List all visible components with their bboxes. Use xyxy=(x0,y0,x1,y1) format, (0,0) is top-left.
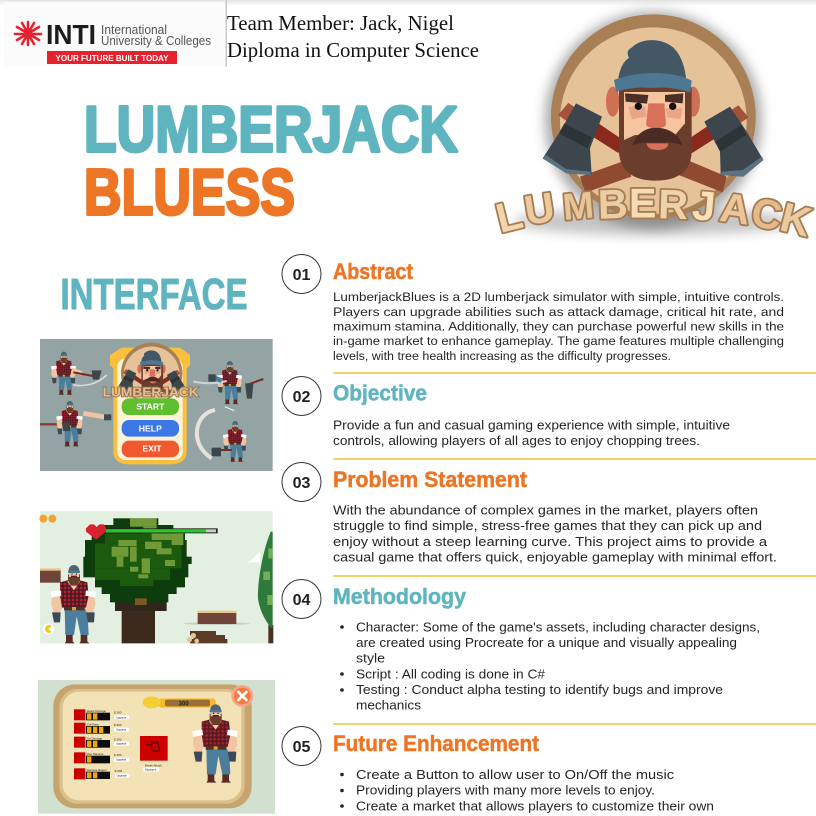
logo wordmark: A xyxy=(717,184,753,234)
section 04: methodology: are created using Procreate for a unique and visually appealing xyxy=(356,635,737,650)
upgrade row: attack damage xyxy=(74,709,129,720)
character pose: bottom left xyxy=(40,401,111,446)
section 03: problem statement: enjoy without a steep learning curve. This project aims to provide a xyxy=(333,534,768,549)
health bar xyxy=(105,528,218,533)
header: INTI logo: University & Colleges xyxy=(101,33,211,48)
header: INTI logo xyxy=(4,2,224,66)
character xyxy=(51,565,96,643)
screenshot: main menu: LUMBERJACK xyxy=(103,385,200,399)
screenshot: gameplay xyxy=(39,511,273,643)
upgrade row: attack damage: $ 200 xyxy=(114,711,122,715)
section 03: problem statement: casual game that offers quick, enjoyable gameplay with minimal effort. xyxy=(333,550,777,564)
upgrade row: stamina regen xyxy=(74,768,130,779)
section 02: objective xyxy=(282,376,730,448)
upgrade row: crit rate: Upgrade xyxy=(116,728,127,732)
icon: red asterisk xyxy=(15,22,41,45)
section 05: future enhancement: 05 xyxy=(293,739,310,756)
upgrade row: stamina regen: Stamina Regen xyxy=(87,768,107,772)
wooden board xyxy=(53,684,252,808)
logo wordmark: M xyxy=(561,183,596,228)
screenshot: upgrade market xyxy=(38,680,275,814)
joystick icon xyxy=(43,623,54,635)
logo wordmark: R xyxy=(657,181,689,228)
title: LUMBERJACK xyxy=(84,92,458,166)
upgrade row: crit rate: $ 300 xyxy=(114,723,122,727)
section 02: objective: 02 xyxy=(293,389,310,406)
section 04: methodology: 04 xyxy=(293,592,310,609)
button: help xyxy=(122,420,179,437)
header: INTI logo: International xyxy=(101,22,167,37)
clouds xyxy=(83,538,260,562)
close button xyxy=(231,685,253,707)
pixel tree xyxy=(83,518,192,643)
icon: heart xyxy=(86,524,106,540)
upgrade row: stamina regen: Upgrade xyxy=(117,774,127,778)
upgrade row: crit rate: Crit Rate xyxy=(87,722,99,726)
section 01: abstract: maximum stamina. Additionally, they can purchase powerful new skills in the xyxy=(333,320,784,334)
team and course text: Diploma in Computer Science xyxy=(227,38,479,62)
button: exit xyxy=(122,441,179,457)
logo wordmark: J xyxy=(690,182,717,230)
screenshot: main menu xyxy=(40,339,273,471)
upgrade row: crit damage: Upgrade xyxy=(116,742,127,746)
section 01: abstract: Abstract xyxy=(333,259,414,284)
section 03: problem statement xyxy=(282,462,777,564)
upgrade row: crit damage: Crit Damage xyxy=(87,736,102,740)
upgrade row: crit damage xyxy=(74,736,129,748)
heading: interface: INTERFACE xyxy=(60,270,248,319)
upgrade row: crit damage: $ 200 xyxy=(114,738,122,742)
section 01: abstract: 01 xyxy=(293,267,310,284)
section 01: abstract: Players can upgrade abilities such as attack damage, critical hit rate, and xyxy=(333,305,784,319)
section 03: problem statement: 03 xyxy=(293,475,310,492)
team and course text: Team Member: Jack, Nigel xyxy=(227,11,454,35)
section 03: problem statement: struggle to find simple, stress-free games that they can pick up and xyxy=(333,518,762,533)
title xyxy=(84,92,458,228)
section 01: abstract: in-game market to enhance gameplay. The game features multiple challenging xyxy=(333,334,784,348)
upgrade row: attack damage: Upgrade xyxy=(116,715,127,719)
character pose: top right xyxy=(193,361,263,404)
character xyxy=(192,704,238,783)
section 04: methodology: Methodology xyxy=(333,584,467,609)
section 05: future enhancement: Future Enhancement xyxy=(333,731,540,756)
coin icons xyxy=(39,515,56,523)
section 04: methodology: mechanics xyxy=(356,698,421,712)
logo wordmark: C xyxy=(748,189,786,240)
game logo emblem xyxy=(491,12,816,246)
pine tree xyxy=(258,532,273,643)
section 04: methodology: style xyxy=(356,650,385,666)
skill card: Break Attack xyxy=(145,763,162,767)
section 02: objective: Objective xyxy=(333,380,427,406)
logo wordmark: L xyxy=(491,191,527,242)
upgrade row: attack damage: Attack Damage xyxy=(87,709,106,713)
section 03: problem statement: Problem Statement xyxy=(333,467,528,492)
character pose: bottom right xyxy=(197,407,247,462)
button: help: HELP xyxy=(139,423,162,433)
button: start: START xyxy=(136,402,165,412)
title: BLUESS xyxy=(84,156,295,228)
logo wordmark xyxy=(491,181,816,246)
header: INTI logo: YOUR FUTURE BUILT TODAY xyxy=(56,54,169,63)
small emblem xyxy=(118,343,185,404)
upgrade row: crit rate xyxy=(74,722,129,734)
stumps and logs xyxy=(40,568,250,643)
section 04: methodology: Character: Some of the game's assets, including character designs, xyxy=(356,620,760,634)
section 04: methodology: Testing : Conduct alpha testing to identify bugs and improve xyxy=(356,682,723,697)
top grey band xyxy=(0,0,816,6)
upgrade row: max stamina: $ 100 xyxy=(114,753,122,757)
logo wordmark: K xyxy=(776,194,816,246)
section 04: methodology xyxy=(282,580,760,712)
team and course text xyxy=(227,11,479,62)
character pose: top left xyxy=(51,352,107,395)
section 04: methodology: Script : All coding is done in C# xyxy=(356,666,546,682)
section 01: abstract: LumberjackBlues is a 2D lumberjack simulator with simple, intuitive controls. xyxy=(333,290,784,304)
skill card xyxy=(140,736,168,771)
coin counter: 300 xyxy=(179,701,189,707)
menu panel xyxy=(110,348,190,464)
section 05: future enhancement: Create a Button to allow user to On/Off the music xyxy=(356,767,674,782)
section 05: future enhancement: Create a market that allows players to customize their own xyxy=(356,798,714,814)
section 03: problem statement: With the abundance of complex games in the market, players often xyxy=(333,502,758,518)
upgrade row: max stamina xyxy=(74,752,129,763)
skill card: Equipped xyxy=(145,767,157,771)
button: exit: EXIT xyxy=(142,444,162,454)
button: start xyxy=(122,398,179,415)
section 05: future enhancement: Providing players with many more levels to enjoy. xyxy=(356,782,655,798)
upgrade row: stamina regen: $ 200 xyxy=(115,769,122,773)
upgrade row: max stamina: Upgrade xyxy=(116,758,127,762)
header: INTI logo: INTI xyxy=(46,19,96,50)
section 02: objective: controls, allowing players of all ages to enjoy chopping trees. xyxy=(333,433,700,448)
upgrade row: max stamina: Max Stamina xyxy=(87,752,104,756)
logo wordmark: E xyxy=(629,181,656,227)
coin counter xyxy=(143,696,216,708)
section 01: abstract xyxy=(282,254,784,363)
logo wordmark: B xyxy=(597,181,629,228)
section 05: future enhancement xyxy=(282,726,714,814)
section 02: objective: Provide a fun and casual gaming experience with simple, intuitive xyxy=(333,418,730,432)
logo wordmark: U xyxy=(521,184,558,234)
section 01: abstract: levels, with tree health increasing as the difficulty progresses. xyxy=(333,349,671,363)
